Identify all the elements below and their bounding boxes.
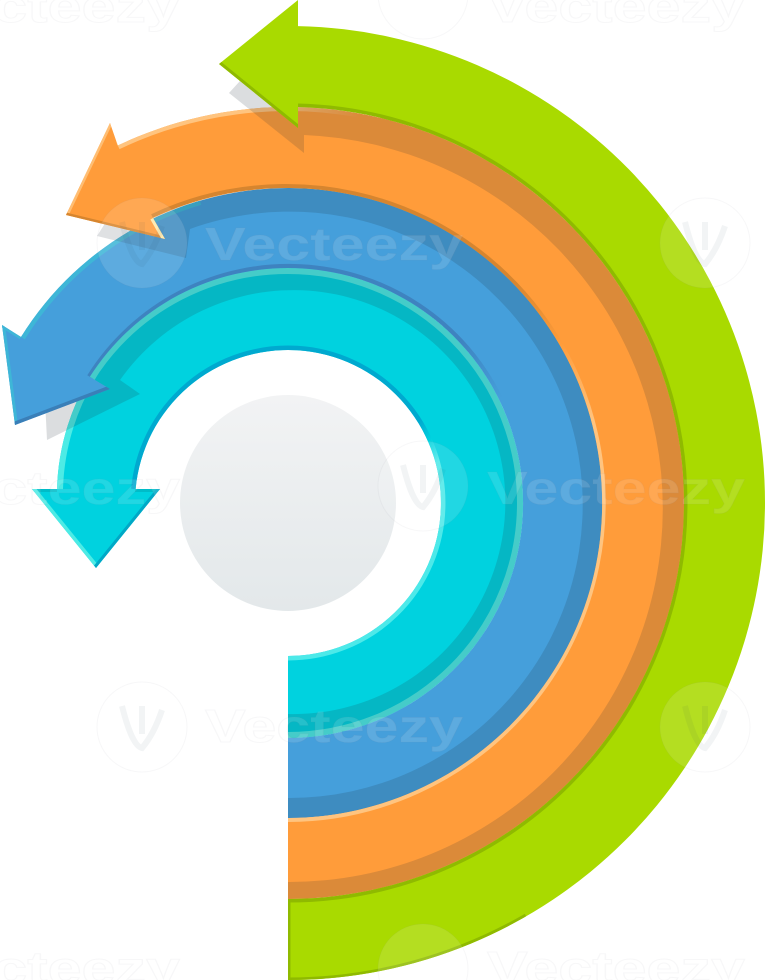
teal arrow ring <box>32 268 523 738</box>
watermark: Vecteezy <box>487 462 746 514</box>
shadow cast on teal ring by blue arrow <box>45 268 523 738</box>
shadow cast on blue ring by orange arrow <box>97 188 603 818</box>
orange arrow ring <box>66 107 684 899</box>
shadow cast on orange ring by green arrow <box>229 70 684 899</box>
central disc <box>180 395 396 611</box>
watermark: Vecteezy <box>205 700 464 752</box>
watermark: Vecteezy <box>205 218 464 270</box>
blue arrow ring <box>2 188 604 818</box>
green arrow ring <box>219 0 765 980</box>
